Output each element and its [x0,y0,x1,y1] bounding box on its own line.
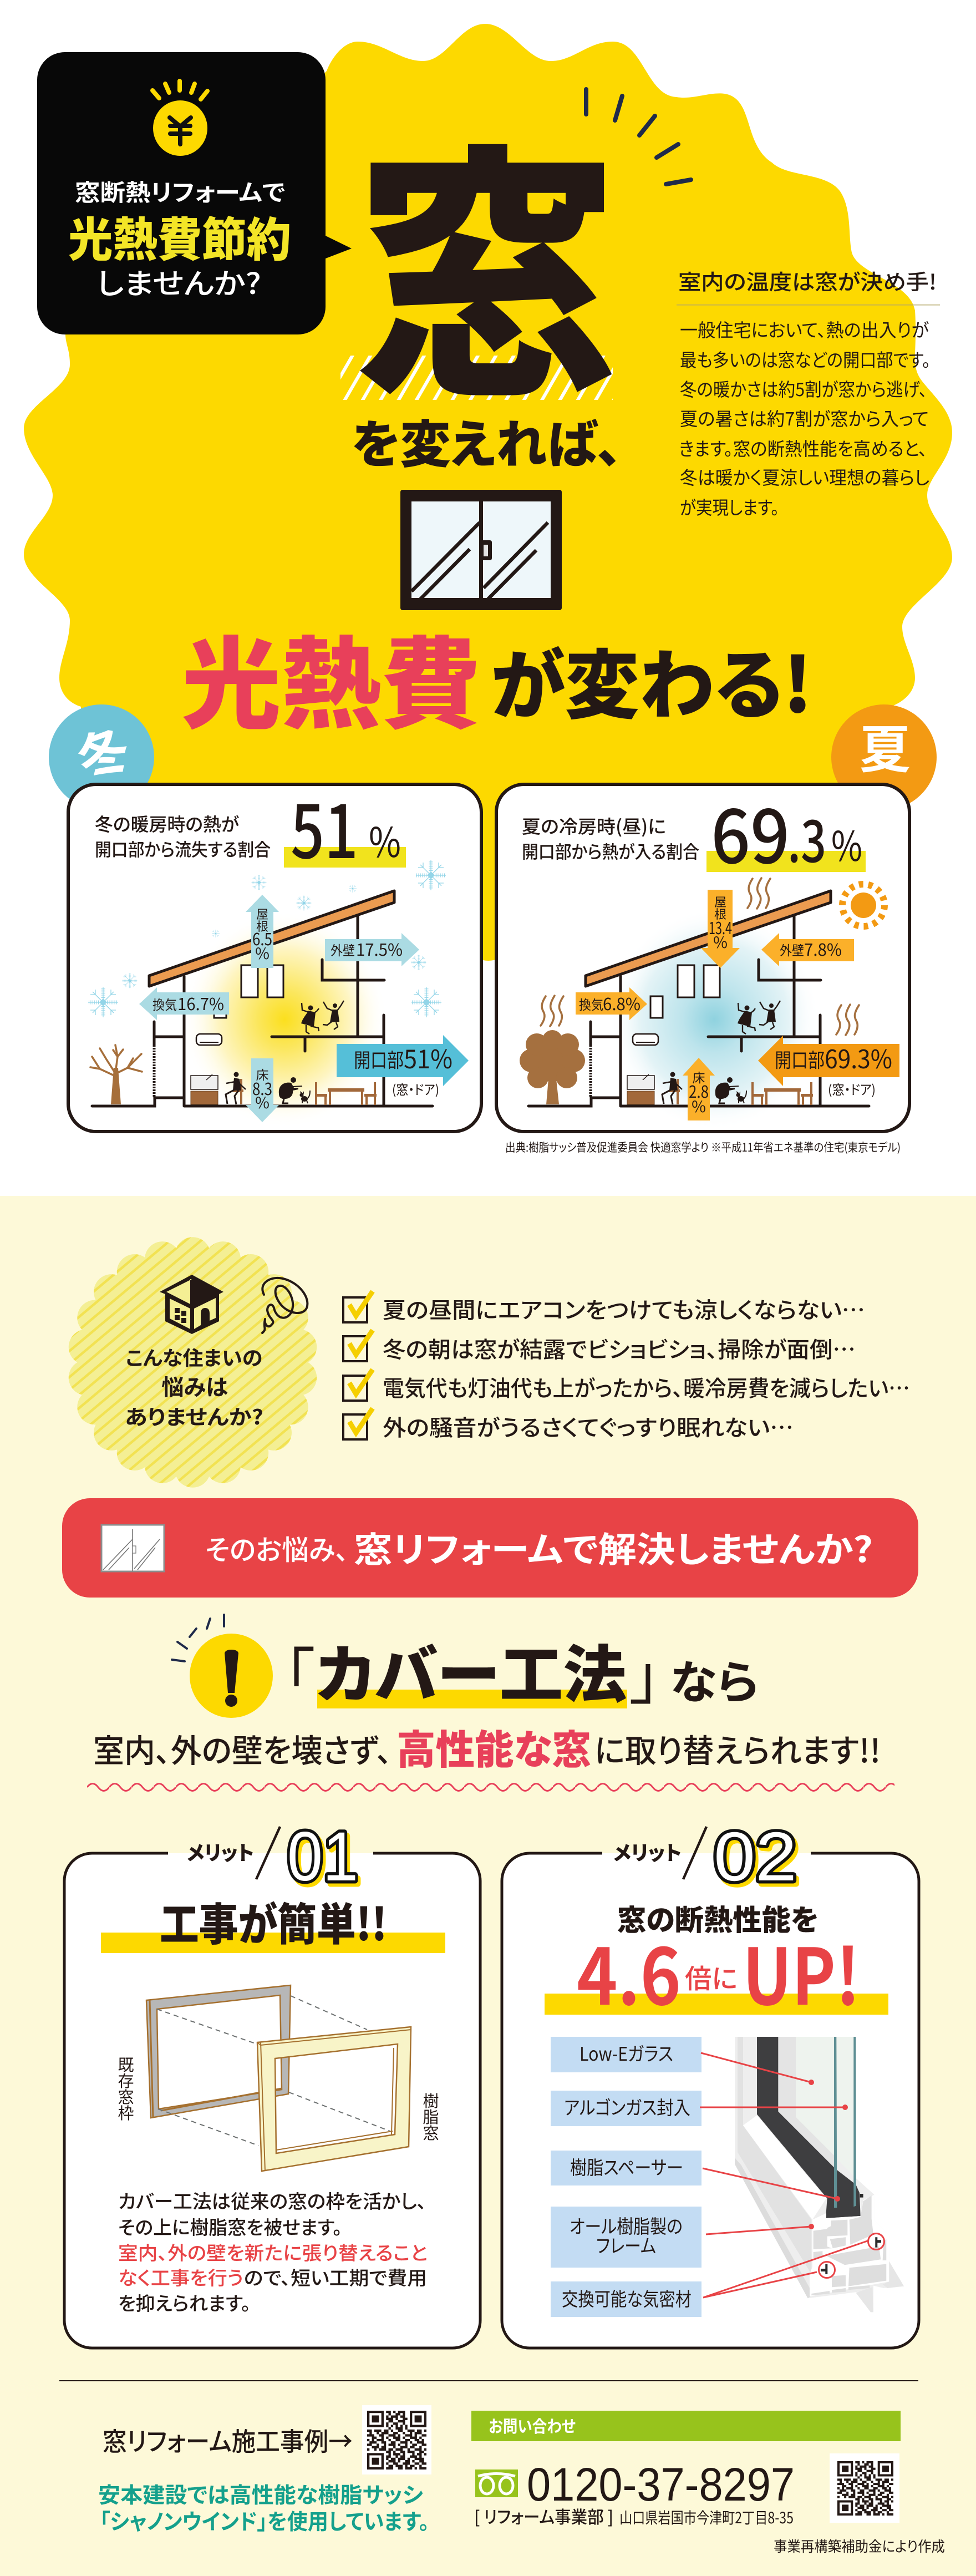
footer credit: 事業再構築補助金により作成 [774,2536,945,2556]
winter heading text: 開口部から流失する割合 [95,836,271,861]
footer: contact: [ リフォーム事業部 ] [474,2503,613,2528]
arrow: ventilation 6.8% [576,987,647,1020]
house diagram: winter [92,891,433,1106]
arrow: wall 17.5%: 外壁 [331,940,355,959]
summer heading text: 開口部から熱が入る割合 [522,838,699,864]
merit label [187,1818,358,1895]
arrow: roof 13.4%: % [713,931,728,953]
merit 01 body: ので、短い工期で費用 [244,2263,427,2290]
checklist [343,1291,910,1442]
bubble text: しませんか? [96,261,261,302]
subheading: 高性能な窓 [396,1717,591,1776]
arrow: wall 7.8% [761,933,854,966]
speech bubble: intro [37,52,352,334]
winter statistic 51%: 51 [291,774,358,880]
arrow: roof 6.5%: 屋 [256,905,268,922]
summer glow [609,909,820,1130]
arrow: floor 2.8%: 2.8 [689,1078,709,1103]
subheading [93,1717,881,1776]
icon: summer tree [520,1030,585,1104]
item 4: 外の騒音がうるさくてぐっすり眠れない… [383,1410,794,1442]
subheading: 室内、外の壁を壊さず、 [93,1725,392,1772]
wavy divider [87,1782,894,1793]
panel: merit 02 [502,1818,919,2348]
explanation body: 冬の暖かさは約5割が窓から逃げ、 [680,375,927,402]
summer statistic 69.3%: 69 [711,779,790,885]
merit label: メリット [613,1837,682,1866]
arrow: roof 13.4% [701,890,740,968]
footer divider [59,2380,918,2381]
summer heading text: 夏の冷房時(昼)に [522,812,666,839]
arrow: floor 8.3%: % [255,1091,270,1113]
merit label [613,1818,797,1895]
explanation heading: 室内の温度は窓が決め手! [678,265,937,296]
summer statistic 69.3%: % [831,814,862,873]
panel: winter [68,774,481,1132]
arrow: ventilation 6.8%: 換気 [579,994,603,1013]
title: big 窓: 窓 [356,63,618,447]
footer: contact [471,2411,901,2528]
arrow: openings 69.3% [758,1036,899,1086]
winter heading text [95,810,271,861]
label: window and door: (窓・ドア) [392,1079,439,1098]
arrow: wall 7.8%: 外壁 [780,940,804,959]
icon: house [160,1275,223,1334]
subheading: に取り替えられます!! [594,1725,881,1772]
arrow: roof 6.5% [246,895,279,968]
heading: cover method [255,1625,759,1716]
label: Low-E glass: Low-Eガラス [580,2039,673,2066]
arrow: floor 8.3%: 床 [256,1064,268,1083]
arrow: openings 51%: 51% [404,1039,453,1076]
merit 01 body: なく工事を行う [118,2263,243,2290]
item 2: 冬の朝は窓が結露でビショビショ、掃除が面倒… [383,1332,856,1364]
label: resin window: 窓 [423,2121,439,2144]
arrow: openings 69.3%: 69.3% [825,1039,892,1076]
merit 02 title: 窓の断熱性能を [617,1897,819,1939]
house diagram: summer [528,891,869,1106]
label: resin window: 樹 [423,2088,439,2112]
arrow: roof 6.5%: 根 [256,917,268,935]
label: replaceable seal: 交換可能な気密材 [562,2284,692,2311]
merit label: 01 [287,1818,358,1895]
arrow: wall 17.5%: 17.5% [356,936,403,961]
label: all resin frame [570,2212,683,2258]
explanation body: 冬は暖かく夏涼しい理想の暮らし [680,463,929,490]
arrow: roof 6.5%: % [255,942,270,964]
leader lines [700,2053,884,2298]
arrow: openings 51%: 開口部 [354,1044,404,1073]
footer: shannon window note: 「シャノンウインド」を使用しています。 [100,2505,429,2536]
arrow: ventilation 16.7%: 換気 [152,994,177,1013]
arrow: ventilation 16.7%: 16.7% [177,991,224,1015]
label: window and door: (窓・ドア) [828,1079,876,1098]
hatch under big character [340,356,613,400]
footer: shannon window note [98,2478,429,2536]
explanation body: きます。窓の断熱性能を高めると、 [679,434,927,461]
footer: shannon window note: 安本建設では高性能な樹脂サッシ [98,2478,423,2509]
title: 光熱費: 光熱費 [181,604,481,749]
heading: cover method: カバー工法 [316,1625,627,1715]
label: all resin frame: フレーム [596,2231,656,2258]
merit 01 body: その上に樹脂窓を被せます。 [118,2213,342,2240]
explanation body: 一般住宅において、熱の出入りが [680,316,929,342]
callout labels with leader lines [551,2037,884,2317]
panel: merit 01 [64,1818,480,2348]
source credit: 出典:樹脂サッシ普及促進委員会 快適窓学より ※平成11年省エネ基準の住宅(東京モデル) [505,1139,901,1155]
icon: worry spiral [262,1278,307,1333]
badge text: ありませんか? [125,1401,263,1431]
merit 02 title: 倍に [685,1957,738,1996]
merit label: 02 [714,1818,797,1895]
winter glow [182,911,387,1128]
summer statistic 69.3%: .3 [787,797,826,879]
banner: solve with window reform: 窓リフォームで解決しませんか? [354,1522,873,1573]
merit 01 title: 工事が簡単!! [160,1889,387,1954]
summer statistic 69.3% [706,779,866,885]
arrow: openings 51% [337,1035,469,1086]
arrow: roof 13.4%: 屋 [714,893,726,910]
winter statistic 51%: % [369,810,401,869]
merit 01 body: 室内、外の壁を新たに張り替えること [118,2238,428,2265]
item 3: 電気代も灯油代も上がったから、暖冷房費を減らしたい… [383,1371,910,1403]
arrow: ventilation 6.8%: 6.8% [603,991,640,1015]
label: resin window: 脂 [423,2105,439,2128]
footer: contact: お問い合わせ [489,2413,576,2437]
arrow: roof 13.4%: 根 [714,905,726,922]
explanation body [679,316,931,520]
badge: worries [69,1237,317,1488]
bubble text: 光熱費節約 [68,203,291,270]
merit 01 body: カバー工法は従来の窓の枠を活かし、 [118,2187,426,2214]
arrow: wall 17.5% [325,933,419,966]
illustration: window cross section [735,2037,904,2312]
arrow: floor 8.3%: 8.3 [252,1076,272,1100]
banner: solve with window reform: そのお悩み、 [205,1528,349,1568]
item 1: 夏の昼間にエアコンをつけても涼しくならない… [383,1292,865,1325]
merit 02 title [545,1897,888,2027]
arrow: openings 69.3%: 開口部 [775,1044,825,1073]
icon: free dial [475,2469,518,2497]
label: existing frame: 既 [118,2052,134,2076]
heading: cover method: 「 [255,1627,316,1716]
label: resin spacer: 樹脂スペーサー [570,2153,683,2180]
winter statistic 51% [284,774,406,880]
winter badge: 冬 [65,707,139,794]
label: existing frame: 窓 [118,2085,134,2108]
winter heading text: 冬の暖房時の熱が [95,810,240,836]
summer badge: 夏 [860,709,911,783]
arrow: floor 2.8%: % [692,1095,706,1117]
badge text: 悩みは [161,1370,228,1402]
merit 02 title: 4.6 [577,1915,681,2027]
label: existing frame: 存 [118,2068,134,2092]
merit 01 body [118,2187,428,2316]
badge text [125,1342,263,1431]
icon: heat waves [541,878,859,1035]
summer heading text [522,812,699,864]
merit 02 title: UP! [743,1915,860,2027]
winter badge [49,704,154,810]
yellow burst background [24,24,952,961]
heading: cover method: なら [670,1646,759,1712]
heading: cover method: 」 [629,1627,690,1716]
arrow: roof 6.5%: 6.5 [252,926,272,950]
label: argon gas: アルゴンガス封入 [564,2093,690,2120]
badge text: こんな住まいの [125,1342,263,1371]
summer badge [831,704,937,810]
title: が変わる: が変わる! [491,625,812,734]
arrow: floor 8.3% [246,1058,279,1122]
footer: contact: 山口県岩国市今津町2丁目8-35 [619,2506,794,2528]
icon: sun [842,884,884,926]
lower section cream background [0,1196,976,2576]
icon: exclamation [172,1615,273,1718]
label: existing frame: 枠 [118,2101,134,2124]
panel: summer [496,779,909,1132]
banner: solve with window reform [62,1498,918,1598]
title: を変えれば: を変えれば、 [352,404,622,478]
bubble text [68,174,291,302]
arrow: ventilation 16.7% [139,987,229,1020]
label: all resin frame: オール樹脂製の [570,2212,683,2239]
explanation body: が実現します。 [680,493,779,520]
arrow: floor 2.8%: 床 [692,1067,705,1086]
text block: temperature explanation [677,265,940,520]
footer: case studies link: 窓リフォーム施工事例→ [103,2422,353,2458]
illustration: existing frame and resin window [146,1985,411,2171]
arrow: wall 7.8%: 7.8% [804,936,842,961]
emphasis rays [586,89,691,184]
footer: contact: 0120-37-8297 [527,2458,795,2511]
merit 01 body: を抑えられます。 [118,2289,251,2316]
arrow: floor 2.8% [683,1058,715,1120]
icon: window [400,490,562,610]
icon: bare tree [90,1045,142,1104]
merit label: メリット [187,1837,254,1866]
explanation body: 最も多いのは窓などの開口部です。 [680,346,931,372]
page background top [0,0,976,1196]
explanation body: 夏の暑さは約7割が窓から入って [680,404,929,431]
icon: window small [101,1525,164,1571]
footer: case studies link [103,2405,431,2474]
icon: snowflakes [88,860,446,1017]
bubble text: 窓断熱リフォームで [75,174,285,208]
icon: yen coin [152,81,207,156]
arrow: roof 13.4%: 13.4 [709,915,732,939]
